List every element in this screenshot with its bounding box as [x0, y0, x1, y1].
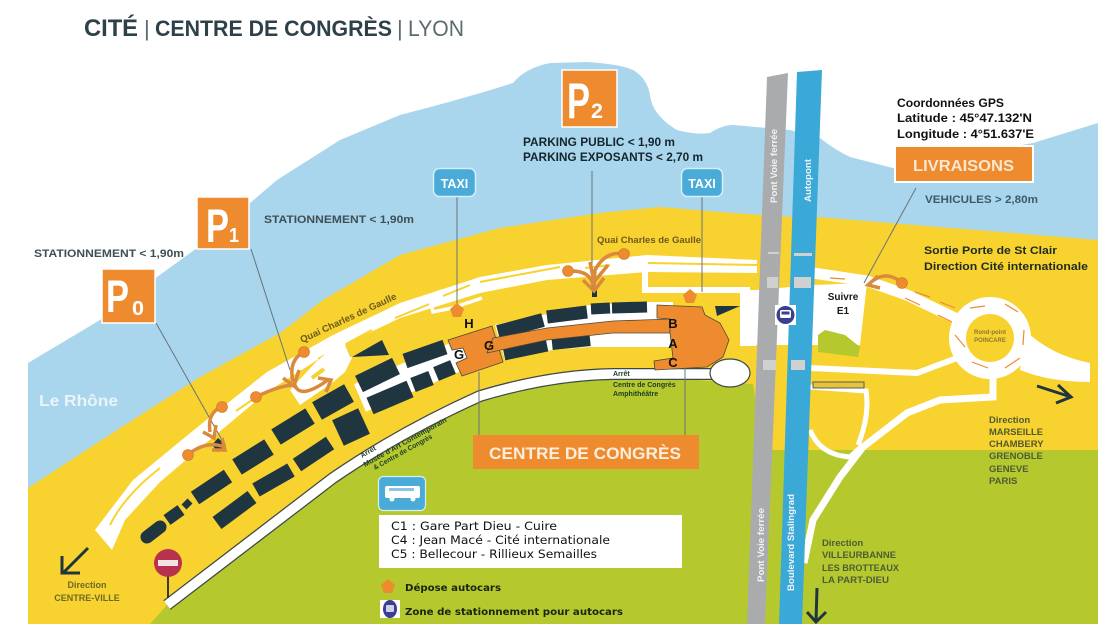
taxi access loop — [430, 298, 482, 312]
plaza near P1 — [290, 343, 352, 405]
exit directions — [924, 245, 1088, 273]
street names: Quai Charles de Gaulle — [299, 291, 398, 346]
river name: Le Rhône — [39, 393, 118, 410]
no entry sign — [154, 549, 182, 598]
taxi sign west — [434, 168, 476, 196]
building entrance letters: H — [464, 316, 474, 331]
taxi sign west: TAXI — [441, 177, 468, 191]
sign P1: P — [206, 199, 229, 252]
arrows P1 — [256, 352, 331, 397]
direction east labels: CHAMBERY — [989, 439, 1044, 450]
building entrance letters: G — [454, 347, 464, 362]
terminal turnaround — [710, 359, 750, 387]
arrows P2 — [568, 253, 624, 291]
lower road — [167, 374, 712, 605]
legend: coach drop-off — [381, 579, 501, 594]
building entrance letters: C — [668, 355, 678, 370]
Suivre E1 — [828, 292, 859, 317]
roundabout label: Rond-point — [974, 330, 1006, 336]
railway bridge — [747, 73, 788, 624]
livraisons sign — [895, 146, 1033, 182]
sign P1: 1 — [229, 225, 239, 247]
parking slot yellow — [345, 332, 392, 357]
motorway bridge — [779, 70, 822, 624]
bridge names: Pont Voie ferrée — [769, 129, 780, 203]
bus stop label musée: & Centre de Congrès — [373, 434, 434, 472]
legend: coach parking: Zone de stationnement pour autocars — [405, 607, 623, 618]
bridge markers — [763, 252, 812, 370]
street names: Quai Charles de Gaulle — [597, 235, 701, 246]
roundabout island — [966, 314, 1014, 362]
access arrow origins — [182, 248, 908, 460]
road network — [95, 255, 1090, 605]
bus lines panel: C1 : Gare Part Dieu - Cuire — [391, 519, 557, 533]
east roads — [813, 273, 957, 319]
quai road — [95, 255, 757, 550]
buildings — [147, 307, 647, 537]
sign P2: 2 — [591, 100, 603, 123]
bus stop label amphitheatre — [613, 371, 676, 398]
parking labels: STATIONNEMENT < 1,90m — [264, 214, 414, 226]
title: CITÉ — [84, 14, 138, 42]
sign P2: P — [567, 73, 590, 129]
GPS coordinates: Latitude : 45°47.132'N — [897, 113, 1032, 125]
direction south labels: LES BROTTEAUX — [822, 563, 900, 574]
roundabout — [949, 297, 1031, 379]
GPS coordinates — [897, 98, 1034, 141]
white band west — [360, 350, 472, 398]
green patch — [818, 330, 860, 357]
direction east labels: MARSEILLE — [989, 427, 1043, 438]
lower roads — [804, 358, 993, 563]
green land — [150, 374, 1098, 624]
direction centre-ville label — [54, 580, 120, 603]
parking markers dark — [212, 288, 740, 452]
direction centre-ville label: CENTRE-VILLE — [54, 593, 120, 603]
yellow land — [28, 207, 1098, 624]
small yellow bar — [813, 382, 864, 388]
livraisons sign: LIVRAISONS — [913, 158, 1014, 175]
parking labels: STATIONNEMENT < 1,90m — [34, 248, 184, 260]
Suivre E1: E1 — [837, 306, 850, 317]
street names — [299, 235, 701, 346]
direction east labels: GRENOBLE — [989, 451, 1043, 462]
direction south labels: LA PART-DIEU — [822, 575, 889, 586]
direction south labels: Direction — [822, 538, 863, 549]
white band centre — [495, 302, 673, 360]
river Rhône — [28, 62, 1098, 500]
bus lines panel: C4 : Jean Macé - Cité internationale — [391, 533, 610, 547]
legend: coach parking — [380, 600, 623, 618]
lower road fill — [167, 374, 712, 605]
direction arrows — [62, 385, 1071, 622]
bridge names: Boulevard Stalingrad — [786, 494, 797, 591]
parking labels: PARKING EXPOSANTS < 2,70 m — [523, 150, 703, 164]
bridge names — [756, 129, 814, 591]
building entrance letters: B — [668, 316, 678, 331]
direction south labels — [822, 538, 900, 586]
direction east labels: GENEVE — [989, 464, 1029, 475]
bus stop label amphitheatre: Centre de Congrès — [613, 382, 676, 389]
arrow livraison — [868, 276, 902, 288]
icon: bus sign — [378, 476, 426, 510]
bus lines panel: C5 : Bellecour - Rillieux Semailles — [391, 547, 597, 561]
access arrows — [188, 253, 902, 455]
bus stop label amphitheatre: Amphithéâtre — [613, 391, 658, 398]
vertical white link — [740, 290, 756, 346]
icon: coach parking on map — [775, 305, 796, 325]
building entrance letters — [454, 316, 678, 370]
taxi sign east — [682, 168, 722, 196]
bus stop label amphitheatre: Arrêt — [613, 371, 630, 378]
bus lines panel — [379, 515, 682, 568]
sign P0: 0 — [132, 298, 144, 320]
title: CENTRE DE CONGRÈS — [155, 16, 392, 41]
arrows P0 — [188, 407, 225, 455]
bus stop label musée: Arrêt — [360, 445, 378, 460]
GPS coordinates: Coordonnées GPS — [897, 98, 1004, 110]
direction east labels: PARIS — [989, 476, 1017, 487]
sign P1 — [197, 197, 249, 252]
direction east labels — [989, 415, 1044, 487]
title — [84, 14, 464, 42]
title: LYON — [408, 16, 464, 41]
white zone by Suivre E1 — [756, 283, 867, 345]
direction centre-ville label: Direction — [67, 580, 107, 590]
parking labels: PARKING PUBLIC < 1,90 m — [523, 135, 675, 149]
taxi sign east: TAXI — [688, 177, 716, 191]
centre de congrès banner — [473, 435, 699, 469]
sign P0 — [102, 269, 155, 323]
direction south labels: VILLEURBANNE — [822, 550, 896, 561]
leader lines — [156, 171, 916, 440]
taxi drop-off pentagons — [450, 289, 697, 317]
exit east — [1020, 330, 1090, 382]
legend: coach drop-off: Dépose autocars — [405, 583, 501, 594]
sign P2 — [562, 70, 617, 129]
service road east — [645, 268, 750, 290]
yellow block — [730, 316, 740, 346]
title: | — [397, 16, 403, 41]
vehicle height label: VEHICULES > 2,80m — [925, 194, 1038, 206]
quai median lines — [110, 263, 757, 525]
exit directions: Sortie Porte de St Clair — [924, 245, 1058, 257]
Suivre E1: Suivre — [828, 292, 859, 303]
building entrance letters: G — [484, 338, 494, 353]
direction east labels: Direction — [989, 415, 1030, 426]
GPS coordinates: Longitude : 4°51.637'E — [897, 129, 1034, 141]
centre de congrès building — [448, 305, 729, 376]
bridge names: Pont Voie ferrée — [756, 508, 767, 582]
title: | — [144, 16, 150, 41]
bridge names: Autopont — [803, 158, 814, 202]
parking labels — [34, 135, 703, 260]
exit directions: Direction Cité internationale — [924, 261, 1088, 273]
centre de congrès banner: CENTRE DE CONGRÈS — [489, 444, 681, 463]
yellow slit — [312, 369, 324, 378]
roundabout label: POINCARE — [974, 338, 1006, 344]
building entrance letters: A — [668, 336, 678, 351]
roundabout label — [974, 330, 1006, 344]
traffic arrows near roundabout — [830, 278, 1024, 368]
bus stop label musée: Musée d'Art Contemporain — [363, 417, 448, 469]
sign P0: P — [106, 271, 129, 322]
